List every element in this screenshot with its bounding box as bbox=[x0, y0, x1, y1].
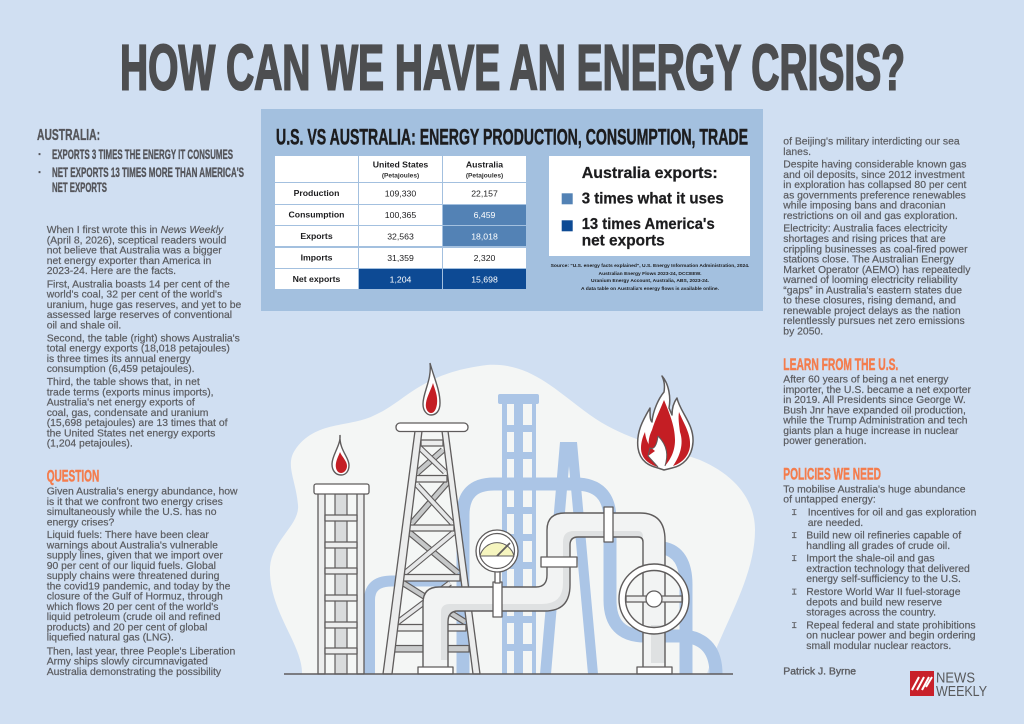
text block: question: products) and 20 per cent of global bbox=[47, 622, 207, 633]
text block: policies list: Import the shale-oil and gas bbox=[806, 554, 935, 565]
icon: pressure gauge bbox=[476, 530, 518, 583]
text block: policies list: Ɪ bbox=[792, 588, 797, 596]
text block: policies list: Ɪ bbox=[792, 621, 797, 630]
background blob bbox=[270, 365, 755, 674]
text block: introduction and facts: trade terms (exports minus imports), bbox=[47, 387, 214, 398]
table: energy figures: (Petajoules) bbox=[382, 172, 419, 180]
text block: continued, Beijing and electricity: to these closures, rising demand, and bbox=[783, 296, 956, 307]
text block: introduction and facts: the United States net energy exports bbox=[47, 428, 215, 439]
table: energy figures: 15,698 bbox=[471, 274, 498, 284]
key points: Australia: · bbox=[38, 167, 42, 179]
callout: Australia exports: net exports bbox=[582, 232, 665, 250]
key points: Australia: EXPORTS 3 TIMES THE ENERGY IT CONSUMES bbox=[52, 147, 233, 162]
icon: valve wheel bbox=[619, 564, 689, 634]
text block: policies list bbox=[783, 484, 977, 652]
text block: introduction and facts: Australia's net energy exports of bbox=[47, 398, 195, 408]
text block: question: closure of the Gulf of Hormuz, through bbox=[47, 592, 223, 602]
table: energy figures: Imports bbox=[301, 252, 333, 262]
illustration: oil and gas plant bbox=[270, 363, 755, 674]
source note bbox=[551, 263, 750, 292]
text block: introduction and facts: world's coal, 32 per cent of the world's bbox=[46, 290, 222, 301]
text block: learn from the U.S.: while the Trump Administration and tech bbox=[782, 416, 968, 427]
table: energy figures bbox=[275, 156, 526, 289]
text block: question: liquid petroleum (crude oil and refined bbox=[47, 612, 221, 623]
tower: oil derrick bbox=[383, 423, 480, 674]
key points: Australia: AUSTRALIA: bbox=[37, 127, 100, 144]
table: energy figures: 18,018 bbox=[471, 232, 498, 242]
text block: continued, Beijing and electricity: restrictions on oil and gas exploration. bbox=[783, 211, 958, 222]
table: energy figures: Consumption bbox=[289, 210, 344, 220]
table: energy figures: Net exports bbox=[293, 274, 341, 284]
table: energy figures: Australia bbox=[466, 160, 503, 170]
callout: Australia exports: 13 times America's bbox=[582, 216, 715, 233]
text block: policies list: of untapped energy: bbox=[783, 495, 876, 506]
text block: introduction and facts: Second, the table (right) shows Australia's bbox=[47, 333, 240, 344]
text block: question: is it that we confront two energy crises bbox=[47, 497, 223, 508]
text block: question: energy crises? bbox=[47, 518, 114, 528]
heading: question: QUESTION bbox=[47, 467, 99, 486]
text block: learn from the U.S.: importer, the U.S. became a net exporter bbox=[783, 385, 972, 396]
source note: A data table on Australia's energy flows is available online. bbox=[581, 286, 720, 292]
text block: introduction and facts: assessed large reserves of conventional bbox=[47, 310, 232, 321]
key points: Australia: NET EXPORTS 13 TIMES MORE THAN AMERICA'S bbox=[52, 165, 244, 180]
text block: continued, Beijing and electricity: as governments preference renewables bbox=[783, 190, 966, 202]
text block: question: Then, last year, three People's Liberation bbox=[47, 646, 235, 657]
table: energy figures: 109,330 bbox=[385, 188, 416, 198]
text block: learn from the U.S.: in 2019. All Presidents since George W. bbox=[783, 395, 966, 406]
table: energy figures: 1,204 bbox=[390, 274, 412, 284]
logo: News Weekly: NEWS bbox=[936, 670, 975, 686]
panel: energy table bbox=[261, 109, 763, 311]
table: energy figures: 2,320 bbox=[474, 253, 496, 263]
background silhouettes bbox=[370, 394, 716, 674]
text block: introduction and facts: coal, gas, condensate and uranium bbox=[47, 408, 208, 419]
table: energy figures: (Petajoules) bbox=[466, 172, 503, 180]
text block: continued, Beijing and electricity: warned of looming electricity reliability bbox=[782, 275, 959, 286]
text block: policies list: small modular nuclear reactors. bbox=[806, 641, 951, 652]
key points: Australia: NET EXPORTS bbox=[52, 180, 107, 195]
text block: learn from the U.S.: power generation. bbox=[783, 436, 866, 447]
key points: Australia: · bbox=[38, 149, 42, 161]
text block: policies list: handling all grades of crude oil. bbox=[806, 541, 950, 552]
text block: question: 90 per cent of our liquid fuels. Global bbox=[47, 561, 216, 572]
text block: introduction and facts: uranium, huge gas reserves, and yet to be bbox=[47, 300, 242, 311]
text block: question: warnings about Australia's vulnerable bbox=[46, 540, 218, 551]
table: energy figures: 22,157 bbox=[471, 188, 498, 198]
text block: continued, Beijing and electricity: Despite having considerable known gas bbox=[783, 160, 966, 171]
ground line bbox=[284, 673, 733, 675]
text block: policies list: Restore World War II fuel-storage bbox=[806, 587, 961, 598]
text block: introduction and facts: First, Australia boasts 14 per cent of the bbox=[47, 279, 230, 290]
text block: policies list: on nuclear power and begin ordering bbox=[806, 631, 976, 642]
text block: policies list: Build new oil refineries capable of bbox=[806, 531, 961, 542]
icon: tall flame bbox=[423, 363, 440, 415]
text block: learn from the U.S.: giants plan a huge increase in nuclear bbox=[783, 426, 959, 437]
text block: policies list: extraction technology that delivered bbox=[806, 564, 970, 575]
table: energy figures: 6,459 bbox=[474, 210, 496, 220]
callout: Australia exports: Australia exports: bbox=[582, 165, 718, 182]
text block: introduction and facts: total energy exports (18,018 petajoules) bbox=[47, 344, 230, 355]
text block: continued, Beijing and electricity: crippling businesses as coal-fired power bbox=[783, 244, 968, 255]
text block: question: liquefied natural gas (LNG). bbox=[47, 632, 174, 644]
text block: learn from the U.S. bbox=[782, 375, 972, 447]
text block: policies list: Ɪ bbox=[792, 554, 797, 563]
text block: continued, Beijing and electricity: renewable project delays as the nation bbox=[783, 306, 961, 317]
table heading: U.S. VS AUSTRALIA: ENERGY PRODUCTION, CONSUMPTION, TRADE bbox=[276, 124, 748, 149]
text block: continued, Beijing and electricity: shortages and rising prices that are bbox=[783, 234, 946, 245]
text block: introduction and facts: consumption (6,459 petajoules). bbox=[47, 364, 195, 375]
text block: introduction and facts: (15,698 petajoules) are 13 times that of bbox=[47, 418, 228, 429]
heading: policies we need: POLICIES WE NEED bbox=[783, 464, 881, 483]
text block: introduction and facts: net energy exporter than America in bbox=[47, 256, 212, 267]
text block: question: supply chains were threatened during bbox=[47, 571, 220, 582]
text block: introduction and facts: (April 8, 2026), sceptical readers would bbox=[47, 235, 227, 246]
text block: question bbox=[46, 487, 238, 678]
logo: News Weekly bbox=[910, 670, 987, 700]
callout: Australia exports bbox=[549, 156, 750, 256]
text block: question: which flows 20 per cent of the world's bbox=[46, 602, 218, 613]
text block: policies list: To mobilise Australia's huge abundance bbox=[783, 484, 966, 495]
table: energy figures: Exports bbox=[300, 231, 333, 241]
text block: question: Liquid fuels: There have been clear bbox=[47, 530, 209, 541]
tower: left flare stack bbox=[314, 484, 369, 674]
text block: policies list: energy self-sufficiency to the U.S. bbox=[806, 574, 961, 585]
table: energy figures: 100,365 bbox=[385, 210, 416, 220]
text block: introduction and facts: oil and shale oil. bbox=[47, 320, 121, 331]
text block: question: the covid19 pandemic, and today by the bbox=[47, 581, 231, 592]
text block: introduction and facts: When I first wrote this in News Weekly bbox=[47, 225, 224, 236]
source note: Australian Energy Flows 2023-24, DCCEEW. bbox=[599, 271, 702, 277]
text block: question: supply lines, given that we import over bbox=[47, 550, 223, 562]
text block: policies list: depots and build new reserve bbox=[806, 597, 942, 608]
text block: continued, Beijing and electricity: and oil deposits, since 2012 investment bbox=[783, 170, 965, 181]
table: energy figures: Production bbox=[294, 188, 339, 198]
table: energy figures: United States bbox=[373, 160, 428, 170]
text block: introduction and facts: not believe that Australia was a bigger bbox=[47, 246, 222, 256]
table: energy figures: 31,359 bbox=[387, 253, 414, 263]
callout: Australia exports: 3 times what it uses bbox=[582, 190, 724, 208]
text block: policies list: are needed. bbox=[808, 518, 863, 529]
text block: question: simultaneously while the U.S. has no bbox=[47, 507, 217, 518]
byline: Patrick J. Byrne bbox=[783, 666, 856, 677]
text block: introduction and facts: 2023-24. Here are the facts. bbox=[47, 266, 176, 277]
text block: continued, Beijing and electricity: stations close. The Australian Energy bbox=[783, 254, 955, 266]
icon: large red flame bbox=[638, 376, 693, 470]
text block: continued, Beijing and electricity: lanes. bbox=[783, 147, 811, 158]
text block: question: Given Australia's energy abundance, how bbox=[47, 487, 238, 498]
text block: continued, Beijing and electricity: of Beijing's military interdicting our sea bbox=[783, 137, 960, 148]
text block: continued, Beijing and electricity: by 2050. bbox=[783, 326, 823, 337]
text block: learn from the U.S.: After 60 years of being a net energy bbox=[783, 375, 949, 386]
text block: policies list: Incentives for oil and gas exploration bbox=[808, 508, 977, 519]
text block: introduction and facts bbox=[46, 225, 242, 450]
text block: introduction and facts: is three times its annual energy bbox=[47, 354, 191, 365]
text block: introduction and facts: Third, the table shows that, in net bbox=[47, 377, 200, 388]
text block: question: Army ships slowly circumnavigated bbox=[47, 657, 208, 668]
key points: Australia bbox=[37, 127, 244, 195]
text block: continued, Beijing and electricity bbox=[782, 137, 971, 337]
source note: Source: "U.S. energy facts explained", U.S. Energy Information Administration, 2024. bbox=[551, 263, 750, 269]
text block: policies list: Repeal federal and state prohibitions bbox=[806, 620, 976, 631]
table: energy figures: 32,563 bbox=[387, 232, 414, 242]
text block: introduction and facts: (1,204 petajoules). bbox=[47, 438, 133, 450]
text block: question: Australia demonstrating the possibility bbox=[47, 667, 222, 678]
text block: continued, Beijing and electricity: relentlessly pursues net zero emissions bbox=[783, 316, 965, 327]
text block: continued, Beijing and electricity: “gaps” in Australia's eastern states due bbox=[783, 285, 962, 296]
text block: continued, Beijing and electricity: Market Operator (AEMO) has repeatedly bbox=[783, 265, 971, 276]
heading: learn from the U.S.: LEARN FROM THE U.S. bbox=[783, 355, 898, 374]
text block: policies list: Ɪ bbox=[792, 531, 797, 540]
text block: policies list: storages across the country. bbox=[806, 608, 936, 618]
logo: News Weekly: WEEKLY bbox=[936, 684, 987, 700]
text block: continued, Beijing and electricity: Electricity: Australia faces electricity bbox=[783, 224, 948, 235]
icon: small flame bbox=[332, 435, 349, 475]
pipes: main pipework bbox=[418, 507, 672, 674]
text block: continued, Beijing and electricity: while imposing bans and draconian bbox=[782, 201, 946, 212]
text block: learn from the U.S.: Bush Jnr have expanded oil production, bbox=[783, 406, 966, 416]
text block: continued, Beijing and electricity: in exploration has collapsed 80 per cent bbox=[783, 180, 967, 191]
source note: Uranium Energy Account, Australia, ABS, 2023-24. bbox=[591, 278, 710, 284]
text block: policies list: Ɪ bbox=[792, 508, 797, 517]
